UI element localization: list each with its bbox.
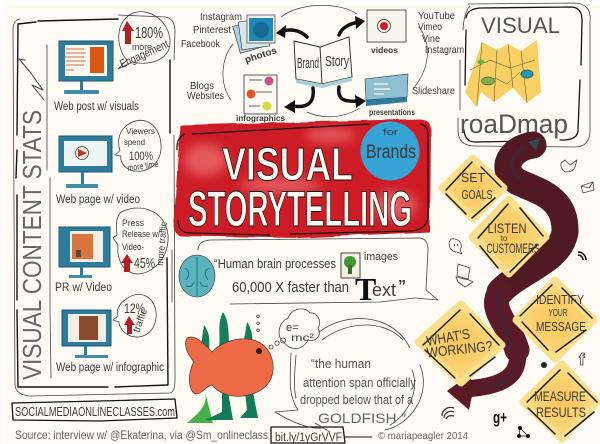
quote: brain versus text — [172, 238, 438, 307]
icon: open book — [294, 37, 352, 88]
quote: brain versus text: images — [364, 251, 398, 263]
callout: viewers spend 100% more time: 100% — [129, 149, 153, 163]
step: listen to customers — [472, 199, 546, 274]
artist credit: © mariapeagler 2014 — [378, 430, 468, 442]
heading: visual content stats: VISUAL CONTENT STATS — [17, 110, 47, 380]
callout: press release with video 45% more traffic: Press — [122, 218, 144, 228]
step: what's working: WHAT'S — [425, 325, 471, 349]
callout: 180% more engagement: 180% — [135, 25, 163, 42]
panel: visual content stats — [13, 12, 175, 396]
icon: facebook f: f — [579, 350, 585, 369]
step: identify your message: IDENTIFY — [536, 293, 585, 307]
callout: press release with video 45% more traffic: 45% — [134, 255, 155, 272]
monitor: web post with visuals — [59, 41, 113, 94]
callout: 12% traffic: 12% — [124, 300, 145, 316]
icon: infographics — [236, 75, 286, 123]
callout: viewers spend 100% more time — [115, 120, 161, 173]
network labels: Websites — [187, 90, 224, 102]
network labels: Facebook — [181, 38, 221, 50]
quote: goldfish attention span — [275, 319, 423, 432]
source credit: Source: interview w/ @Ekaterina, via @Sm_onlineclass — [15, 428, 268, 442]
title text: STORYTELLING — [188, 181, 412, 237]
network labels: Vine — [422, 34, 440, 45]
icon: infographics: infographics — [236, 114, 286, 123]
step: set goals: SET — [461, 170, 485, 185]
step: measure results: RESULTS — [536, 404, 586, 420]
step: set goals: GOALS — [462, 187, 493, 202]
network labels: Instagram — [200, 11, 242, 23]
icon: power dot — [541, 362, 547, 368]
label: web page with video: Web page w/ video — [56, 194, 140, 206]
network labels: Instagram — [425, 45, 464, 56]
step: listen to customers: CUSTOMERS — [486, 240, 540, 256]
icon: presentations — [365, 74, 415, 117]
thought bubbles — [257, 315, 286, 349]
icon: videos: videos — [371, 46, 399, 55]
icon: photos stack: photos — [244, 45, 278, 66]
icon: open book: Story — [325, 53, 349, 70]
icon: google plus: g+ — [493, 408, 507, 427]
cycle arrows — [223, 5, 427, 117]
icon: presentations: presentations — [369, 107, 415, 117]
monitor: web page with video — [59, 136, 112, 188]
title banner — [174, 119, 431, 238]
icon: rss — [578, 252, 586, 260]
quote: goldfish attention span: dropped below that of a — [300, 393, 413, 407]
badge: for brands: Brands — [366, 142, 416, 163]
website link box — [12, 399, 177, 421]
quote: brain versus text: “Human brain processes — [214, 256, 336, 271]
title text: VISUAL — [222, 138, 353, 190]
label: PR with video: PR w/ Video — [55, 282, 112, 294]
step: identify your message: MESSAGE — [536, 319, 586, 334]
icon: videos — [367, 10, 406, 55]
arrows from book — [280, 22, 358, 107]
step: measure results: MEASURE — [534, 389, 586, 404]
icon: envelope — [581, 182, 594, 193]
arrow: winding brown road — [447, 138, 565, 410]
short link box: bit.ly/1yGrVVF — [275, 432, 342, 444]
badge: for brands — [360, 122, 420, 180]
website link box: SOCIALMEDIAONLINECLASSES.com — [15, 404, 175, 419]
step: identify your message — [516, 280, 594, 359]
callout: viewers spend 100% more time: more time — [127, 159, 159, 173]
step: what's working: WORKING? — [426, 338, 493, 360]
badge: for brands: for — [383, 127, 398, 138]
callout: 12% traffic — [113, 294, 156, 337]
callout: 180% more engagement: more — [132, 42, 152, 53]
step: set goals — [442, 158, 504, 219]
seaweed — [187, 312, 258, 423]
callout: 180% more engagement — [118, 12, 171, 71]
label: web page with infographic: Web page w/ infographic — [56, 362, 164, 374]
quote: goldfish attention span: GOLDFISH ” — [318, 410, 406, 426]
monitor: web page with infographic — [62, 310, 111, 358]
quote: goldfish attention span: attention span officially — [303, 376, 417, 390]
icon: tree picture — [341, 253, 360, 278]
network labels: Pinterest — [193, 24, 231, 36]
icon: brain — [179, 255, 215, 297]
fish body — [186, 337, 273, 396]
network labels: YouTube — [418, 11, 455, 22]
icon: folded map — [465, 40, 541, 107]
quote: brain versus text: ” — [398, 278, 406, 295]
icon: wifi — [442, 407, 454, 419]
icon: twitter bird — [561, 160, 577, 172]
step: listen to customers: to — [501, 234, 508, 243]
callout: press release with video 45% more traffic: Release w/ — [122, 229, 160, 240]
callout: press release with video 45% more traffic: more traffic — [155, 221, 170, 266]
network labels — [181, 11, 464, 102]
network labels: Slideshare — [412, 86, 455, 97]
callout: viewers spend 100% more time: spend — [124, 137, 145, 147]
callout: viewers spend 100% more time: Viewers — [126, 126, 155, 136]
quote: brain versus text: T — [355, 271, 376, 307]
quote: goldfish attention span: “the human — [311, 356, 371, 371]
diagram: brand story — [181, 5, 464, 123]
heading: roadmap: roaDmap — [460, 109, 568, 139]
label: web post with visuals: Web post w/ visuals — [54, 101, 139, 113]
network labels: Vimeo — [418, 22, 442, 33]
monitor: PR with video — [59, 227, 110, 278]
icon: photos stack — [233, 15, 278, 66]
step: what's working — [418, 304, 502, 383]
heading: visual: VISUAL — [481, 13, 560, 38]
illustration: goldfish — [186, 309, 320, 423]
illustration: goldfish: mc² — [291, 333, 315, 344]
icon: speech bubble — [449, 239, 462, 254]
short link box — [271, 427, 372, 444]
quote: brain versus text: 60,000 X faster than — [232, 279, 349, 296]
icon: rising zigzag arrow — [18, 59, 44, 100]
illustration: goldfish: e= — [286, 322, 299, 334]
network labels: Blogs — [190, 80, 214, 92]
quote: brain versus text: ext — [372, 280, 396, 300]
step: identify your message: YOUR — [548, 308, 568, 319]
icon: open book: Brand — [297, 55, 319, 72]
step: listen to customers: LISTEN — [488, 220, 526, 236]
icon: share nodes — [517, 426, 530, 438]
callout: press release with video 45% more traffic — [113, 208, 170, 274]
step: measure results — [523, 364, 597, 439]
callout: press release with video 45% more traffic: Video- — [122, 242, 144, 253]
callout: 180% more engagement: Engagement — [118, 38, 171, 71]
panel: visual roadmap — [458, 3, 590, 147]
title text — [188, 138, 412, 237]
callout: 12% traffic: traffic — [131, 307, 150, 334]
icon: laptop — [456, 264, 473, 287]
